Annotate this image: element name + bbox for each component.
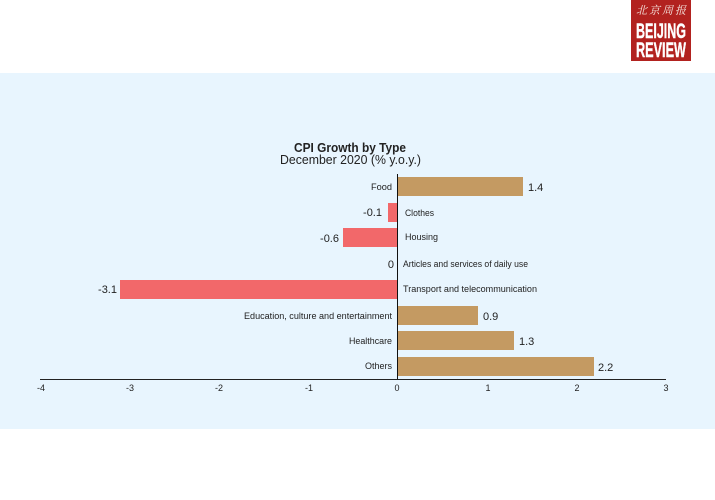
bar chart	[37, 174, 669, 393]
value labels	[98, 182, 613, 374]
category labels: Articles and services of daily use	[403, 259, 528, 269]
bar: Education, culture and entertainment	[397, 306, 478, 325]
axis tick labels: 1	[485, 383, 491, 393]
value labels: -0.1	[363, 207, 382, 219]
axis tick labels: 2	[574, 383, 580, 393]
bar: Housing	[343, 228, 397, 247]
category labels: Clothes	[405, 208, 434, 218]
bar: Food	[397, 177, 523, 196]
axis tick labels: -3	[126, 383, 134, 393]
category labels: Education, culture and entertainment	[244, 311, 393, 321]
category labels: Food	[371, 182, 392, 192]
value labels: 1.3	[519, 336, 534, 348]
bar: Transport and telecommunication	[120, 280, 397, 299]
title: CPI Growth by Type	[294, 141, 406, 155]
category axis line	[396, 174, 398, 379]
category labels: Transport and telecommunication	[403, 284, 537, 294]
value labels: -0.6	[320, 233, 339, 245]
axis tick labels: -4	[37, 383, 45, 393]
logo: Beijing Review	[631, 0, 691, 62]
logo: Beijing Review: 北京周报	[636, 2, 687, 18]
axis tick labels: -2	[215, 383, 223, 393]
category labels: Housing	[405, 232, 438, 242]
bar: Others	[397, 357, 594, 376]
value labels: 0.9	[483, 311, 498, 323]
value labels: -3.1	[98, 284, 117, 296]
value labels: 2.2	[598, 362, 613, 374]
category labels: Others	[365, 361, 392, 371]
axis tick labels: -1	[305, 383, 313, 393]
bar: Clothes	[388, 203, 397, 222]
value labels: 0	[388, 259, 394, 271]
value labels: 1.4	[528, 182, 543, 194]
category labels	[244, 182, 537, 371]
axis tick labels: 0	[394, 383, 400, 393]
axis tick labels: 3	[663, 383, 669, 393]
category labels: Healthcare	[349, 336, 392, 346]
panel: chart background	[0, 73, 715, 429]
bar: Healthcare	[397, 331, 514, 350]
axis tick labels	[37, 383, 669, 393]
subtitle: December 2020 (% y.o.y.)	[280, 153, 421, 167]
value axis line	[40, 378, 666, 380]
